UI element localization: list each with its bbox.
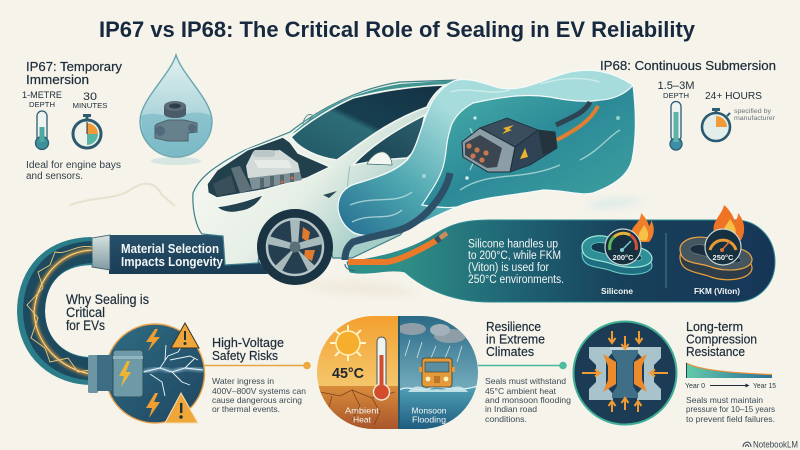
side window (353, 115, 425, 165)
title: IP67 vs IP68: The Critical Role of Sealing in EV Reliability (99, 17, 696, 42)
label: ambient heat (345, 406, 380, 424)
why sealing heading (66, 292, 149, 333)
chart axis: Year 0 (685, 381, 705, 390)
panel: material selection dark bar (92, 235, 268, 274)
body crease line (347, 166, 350, 190)
panel: long-term compression resistance (685, 319, 776, 424)
decay chart (686, 363, 772, 378)
resilience heading: Resilience (486, 319, 541, 334)
icon: warning top (171, 323, 199, 348)
icon: side mirror (367, 152, 392, 165)
label: ambient heat: Ambient (345, 406, 380, 416)
label: FKM Viton: FKM (Viton) (694, 286, 740, 296)
icon: sun (330, 325, 366, 361)
compression heading: Long-term (686, 319, 743, 334)
icon: FKM seal with 250C gauge: 250°C (713, 253, 734, 262)
IP67 heading (26, 60, 123, 87)
high voltage description: 400V–800V systems can (212, 386, 306, 396)
high voltage description: Water ingress in (212, 376, 274, 386)
panel: IP67 temporary immersion (22, 60, 123, 182)
connector line (478, 362, 567, 369)
windshield (291, 85, 445, 160)
IP68 heading: IP68: Continuous Submersion (600, 59, 776, 73)
icon: wiper loop (303, 114, 313, 124)
panel: climate illustration (317, 316, 478, 429)
resilience description (485, 376, 571, 424)
IP67 time stat: 30 (83, 91, 97, 103)
compression description: to prevent field failures. (686, 414, 775, 424)
resilience heading: in Extreme (486, 332, 545, 346)
IP68 note (734, 108, 776, 122)
compression heading: Compression (686, 332, 757, 346)
material comparison text (468, 238, 564, 286)
IP67 description: Ideal for engine bays (26, 160, 121, 171)
IP67 description: and sensors. (26, 171, 83, 182)
icon: compressed seal cross-section (574, 322, 676, 424)
monsoon flooding half (398, 316, 478, 429)
resilience description: conditions. (485, 414, 527, 424)
water body (338, 70, 636, 236)
curved high-voltage cable (27, 246, 92, 374)
panel: resilience in extreme climates (478, 319, 571, 424)
resilience description: in Indian road (485, 404, 537, 414)
IP68 depth stat: DEPTH (663, 93, 689, 100)
icon: thermometer deep (670, 102, 682, 150)
compression description: Seals must maintain (686, 395, 763, 405)
IP67 time stat: MINUTES (72, 103, 108, 110)
icon: thermometer depth gauge (36, 111, 48, 150)
IP67 description (26, 160, 121, 182)
side marker (323, 191, 337, 198)
headlight (217, 195, 263, 212)
label: ambient heat: Heat (353, 414, 372, 424)
high voltage description: or thermal events. (212, 404, 280, 414)
material selection label (121, 241, 224, 269)
IP68 depth stat: 1.5–3M (658, 80, 694, 92)
high voltage heading: High-Voltage (212, 335, 284, 350)
why sealing heading: for EVs (66, 318, 105, 333)
cables leaving the car (345, 173, 450, 271)
label: monsoon flooding: Flooding (412, 414, 446, 424)
IP68 time stat: 24+ HOURS (705, 90, 762, 102)
material selection label: Impacts Longevity (121, 254, 224, 269)
IP68 depth stat (658, 80, 694, 100)
IP67 depth stat (22, 90, 62, 109)
why sealing heading: Why Sealing is (66, 292, 149, 307)
icon: stopwatch 30 minutes (73, 114, 101, 148)
engine bay (207, 137, 330, 198)
label: silicone: Silicone (601, 286, 633, 296)
illustration: arcing connector (88, 324, 204, 423)
car body (193, 80, 470, 265)
icon: warning bottom (165, 393, 198, 423)
why sealing heading: Critical (66, 305, 105, 320)
IP67 time stat (72, 91, 108, 110)
resilience description: and monsoon flooding (485, 395, 571, 405)
wheel (257, 209, 333, 285)
panel: silicone vs FKM material bar (347, 220, 775, 302)
icon: submerged EV connector (462, 102, 598, 172)
icon: silicone seal with 200C gauge (582, 213, 654, 274)
high voltage heading: Safety Risks (212, 348, 278, 363)
compression description (686, 395, 775, 424)
panel: high-voltage safety (88, 323, 311, 423)
high voltage heading (212, 335, 284, 363)
icon: silicone seal with 200C gauge: 200°C (613, 253, 634, 262)
ambient heat half (317, 316, 399, 429)
connector line (204, 362, 311, 369)
high voltage description: cause dangerous arcing (212, 395, 302, 405)
icon: flooded bus (408, 358, 468, 392)
resilience description: 45°C ambient heat (485, 386, 557, 396)
IP67 heading: IP67: Temporary (26, 60, 123, 74)
icon: water droplet with connector (140, 55, 212, 165)
compression description: pressure for 10–15 years (686, 404, 775, 414)
resilience heading: Climates (486, 344, 534, 359)
material selection label: Material Selection (121, 241, 219, 256)
label: monsoon flooding: Monsoon (412, 406, 447, 416)
panel: IP68 continuous submersion (600, 59, 776, 150)
high voltage description (212, 376, 306, 414)
IP68 note: manufacturer (734, 115, 776, 122)
icon: stopwatch 24 hours (702, 108, 730, 141)
IP68 note: specified by (734, 108, 772, 115)
resilience description: Seals must withstand (485, 376, 566, 386)
resilience heading (486, 319, 545, 359)
cable band (109, 235, 268, 274)
material comparison text: (Viton) is used for (468, 262, 549, 274)
car illustration (193, 80, 470, 265)
IP67 depth stat: DEPTH (29, 102, 55, 109)
icon: FKM seal with 250C gauge (680, 205, 752, 280)
chart axis (685, 381, 776, 390)
roof strip (292, 80, 457, 134)
material comparison text: 250°C environments. (468, 274, 564, 286)
compression heading (686, 319, 757, 359)
temperature label: 45°C (332, 365, 364, 382)
IP67 depth stat: 1-METRE (22, 90, 62, 100)
label: monsoon flooding (412, 406, 447, 424)
material comparison text: to 200°C, while FKM (468, 250, 561, 262)
cable collar (92, 235, 110, 270)
icon: heat thermometer (374, 337, 390, 400)
chart axis: Year 15 (753, 381, 776, 390)
divider (665, 233, 667, 288)
IP67 heading: Immersion (26, 73, 89, 87)
material comparison text: Silicone handles up (468, 238, 558, 250)
compression heading: Resistance (686, 344, 745, 359)
